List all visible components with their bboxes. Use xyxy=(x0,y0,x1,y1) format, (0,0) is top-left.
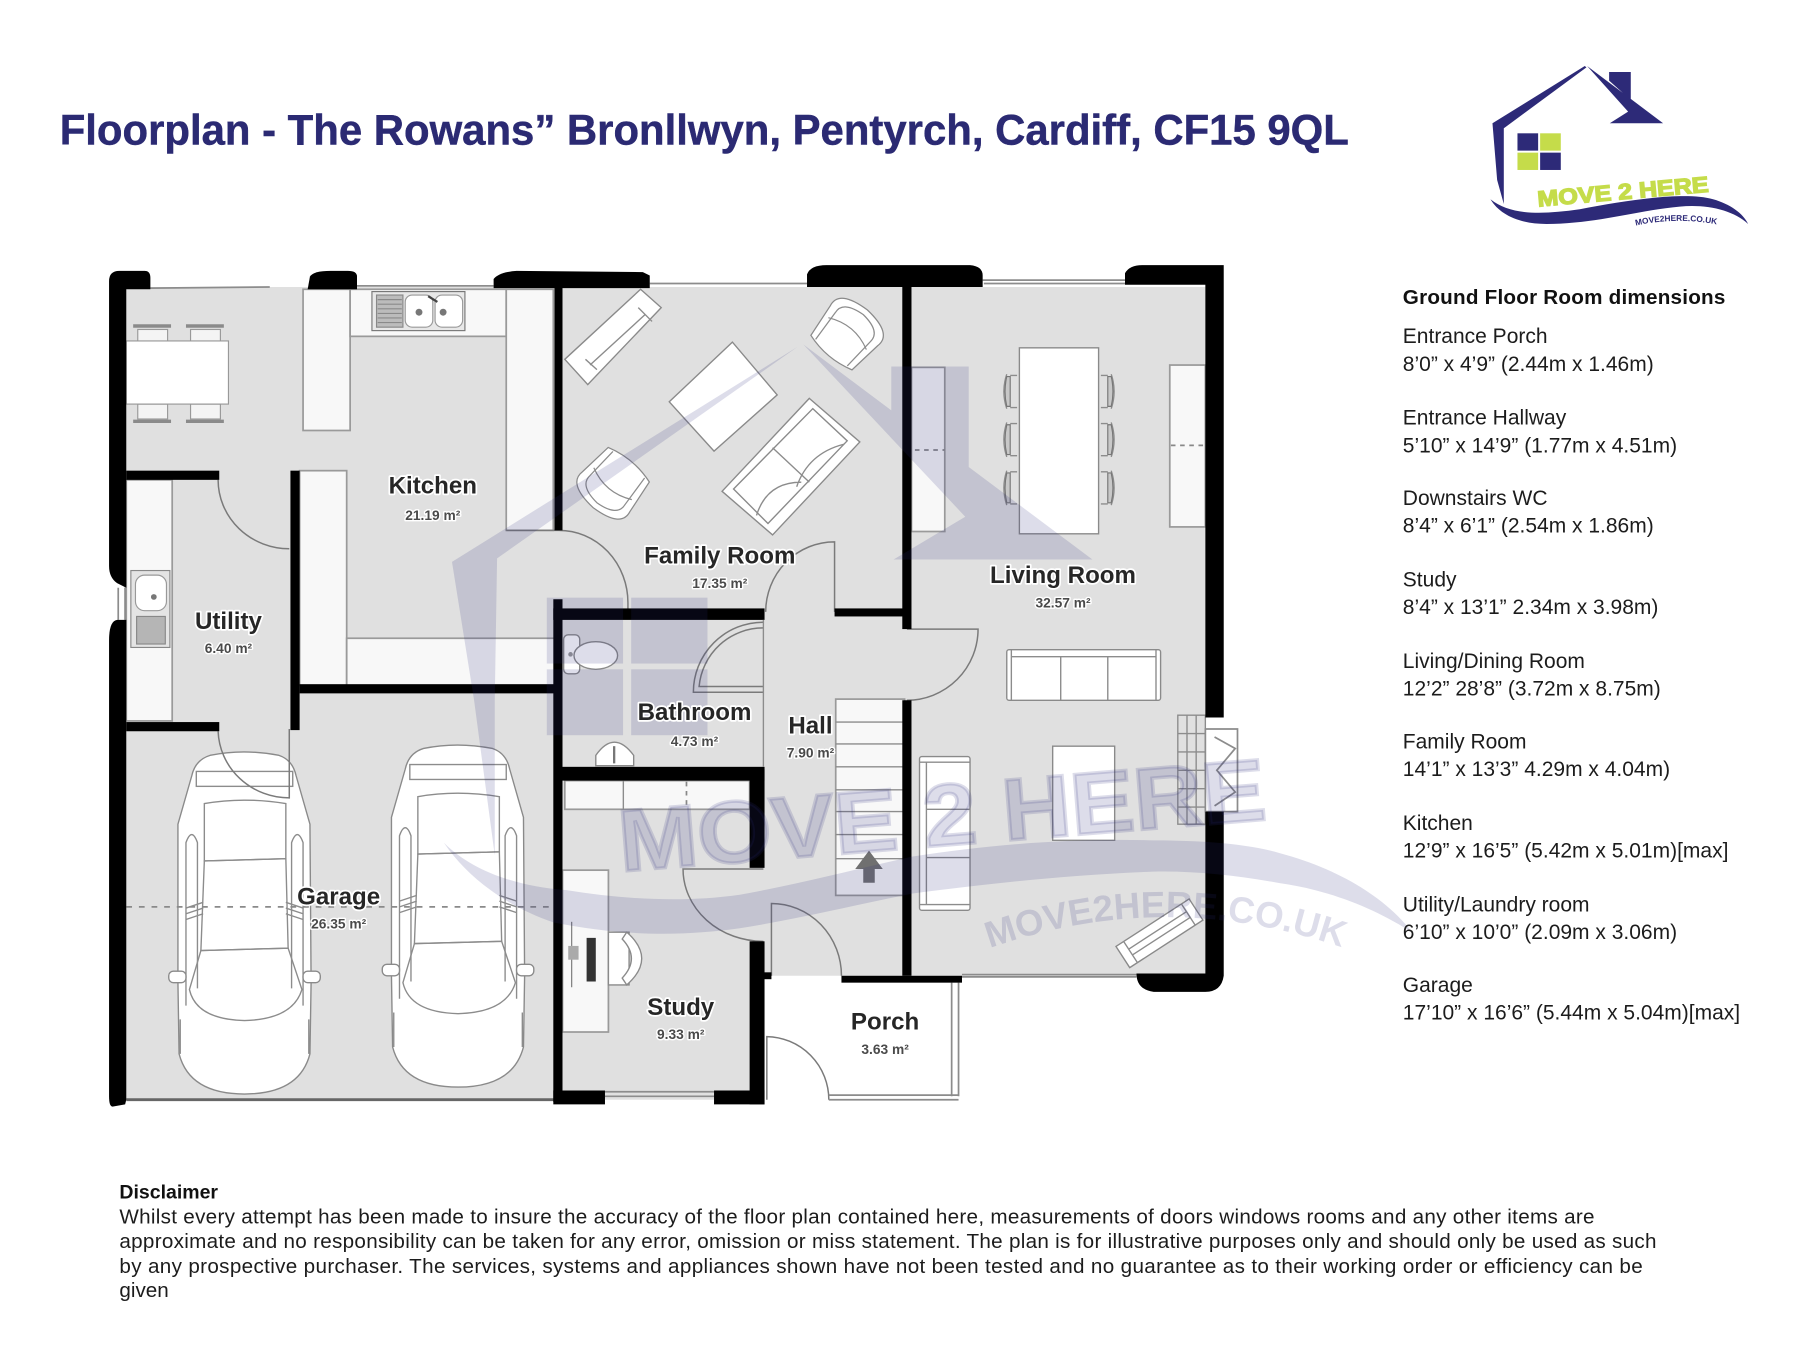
disclaimer body: by any prospective purchaser. The services, systems and appliances shown have not been tested and no guarantee as to their working order or efficiency can be xyxy=(119,1255,1643,1278)
logo: Move 2 Here: MOVE2HERE.CO.UK xyxy=(1635,215,1718,226)
garage label: Garage xyxy=(297,884,380,911)
garage cars and dotted line xyxy=(126,745,554,1094)
garage: Garage xyxy=(1403,974,1473,997)
study label xyxy=(647,994,715,1042)
toilet xyxy=(564,635,618,674)
dining table and chairs xyxy=(1004,348,1114,534)
disclaimer body xyxy=(119,1206,1657,1302)
basin xyxy=(596,742,634,766)
utility counter and sink xyxy=(126,480,172,721)
entrance porch: Entrance Porch xyxy=(1403,325,1548,348)
staircase xyxy=(836,699,905,895)
entrance porch xyxy=(1403,325,1654,376)
logo swoosh xyxy=(1490,196,1748,224)
entrance hallway: 5’10” x 14’9” (1.77m x 4.51m) xyxy=(1403,434,1677,457)
windows xyxy=(118,280,1238,1100)
utility laundry room xyxy=(1403,893,1677,944)
bathroom label xyxy=(638,699,751,749)
porch floor xyxy=(763,978,959,1100)
kitchen xyxy=(1403,812,1728,863)
garage label: 26.35 m² xyxy=(311,917,367,932)
study chair xyxy=(608,932,642,985)
kitchen label xyxy=(389,473,477,523)
utility label: 6.40 m² xyxy=(205,641,253,656)
logo wordmark: MOVE 2 HERE xyxy=(1536,172,1710,212)
hall label: 7.90 m² xyxy=(787,746,835,761)
bench by window xyxy=(1116,899,1203,968)
study desk xyxy=(562,870,608,1032)
downstairs wc: 8’4” x 6’1” (2.54m x 1.86m) xyxy=(1403,515,1654,538)
living room label xyxy=(990,562,1136,610)
title: Floorplan - The Rowans” Bronllwyn, Pentyrch, Cardiff, CF15 9QL xyxy=(60,107,1349,154)
floor area xyxy=(124,287,1205,1100)
up arrow xyxy=(855,851,883,883)
kitchen sink xyxy=(372,292,465,331)
walls xyxy=(109,265,1224,1107)
watermark roof and chimney xyxy=(803,344,1092,560)
bathroom label: Bathroom xyxy=(638,699,751,726)
entrance porch: 8’0” x 4’9” (2.44m x 1.46m) xyxy=(1403,353,1654,376)
family room label: 17.35 m² xyxy=(692,576,748,591)
study units xyxy=(562,781,750,1032)
utility label: Utility xyxy=(195,608,263,635)
watermark url xyxy=(990,917,1357,953)
study label: 9.33 m² xyxy=(657,1027,705,1042)
three-seat sofa xyxy=(1007,650,1161,700)
radiator grid xyxy=(1178,715,1205,824)
entrance hallway: Entrance Hallway xyxy=(1403,407,1567,430)
living room label: Living Room xyxy=(990,562,1136,589)
watermark xyxy=(444,345,1410,948)
study: 8’4” x 13’1” 2.34m x 3.98m) xyxy=(1403,596,1658,619)
hall label xyxy=(787,713,835,761)
study desk items xyxy=(568,922,596,987)
watermark house outline xyxy=(452,347,798,855)
coffee table xyxy=(669,342,777,451)
porch label: 3.63 m² xyxy=(861,1042,909,1057)
family room: 14’1” x 13’3” 4.29m x 4.04m) xyxy=(1403,758,1670,781)
family room: Family Room xyxy=(1403,730,1526,753)
utility laundry room: Utility/Laundry room xyxy=(1403,893,1590,916)
watermark swoosh xyxy=(444,840,1413,934)
family room xyxy=(1403,730,1670,781)
logo: Move 2 Here xyxy=(1490,66,1748,226)
right sideboard xyxy=(1170,365,1205,527)
disclaimer xyxy=(119,1181,1657,1302)
family room label xyxy=(644,543,795,591)
watermark wordmark: MOVE 2 HERE xyxy=(615,742,1269,890)
family room sofa xyxy=(722,398,860,535)
armchair top xyxy=(805,290,891,376)
garage label xyxy=(297,884,380,932)
utility laundry room: 6’10” x 10’0” (2.09m x 3.06m) xyxy=(1403,921,1677,944)
living room low table xyxy=(1053,746,1115,840)
family room label: Family Room xyxy=(644,543,795,570)
dimensions heading: Ground Floor Room dimensions xyxy=(1403,286,1725,309)
bathroom label: 4.73 m² xyxy=(671,734,719,749)
kitchen label: 21.19 m² xyxy=(405,508,461,523)
side sofa xyxy=(920,757,970,910)
utility label xyxy=(195,608,263,656)
study label: Study xyxy=(647,994,715,1021)
living dining room xyxy=(1403,650,1661,701)
garage xyxy=(1403,974,1740,1024)
left sideboard xyxy=(911,367,945,532)
car left xyxy=(169,752,320,1094)
room labels xyxy=(195,473,1136,1057)
disclaimer body: given xyxy=(119,1279,169,1302)
disclaimer heading: Disclaimer xyxy=(119,1181,218,1203)
study: Study xyxy=(1403,569,1457,592)
kitchen: Kitchen xyxy=(1403,812,1473,835)
hall label: Hall xyxy=(788,713,833,740)
bathroom partition xyxy=(762,620,764,767)
entrance hallway xyxy=(1403,407,1677,457)
disclaimer body: approximate and no responsibility can be taken for any error, omission or miss statement. The plan is for illustrative purposes only and should only be used as such xyxy=(119,1230,1657,1253)
downstairs wc: Downstairs WC xyxy=(1403,487,1547,510)
doors xyxy=(218,480,978,1100)
disclaimer body: Whilst every attempt has been made to insure the accuracy of the floor plan contained here, measurements of doors windows rooms and any other items are xyxy=(119,1206,1595,1229)
room dimensions panel xyxy=(1403,286,1740,1024)
kitchen: 12’9” x 16’5” (5.42m x 5.01m)[max] xyxy=(1403,840,1728,863)
coat rack bench xyxy=(565,289,661,385)
family room furniture xyxy=(565,289,891,535)
living dining room: Living/Dining Room xyxy=(1403,650,1585,673)
dining table with chairs xyxy=(126,326,228,421)
study xyxy=(1403,569,1658,619)
car right xyxy=(382,745,534,1087)
watermark window xyxy=(547,598,707,735)
logo window xyxy=(1517,133,1561,170)
logo roof and wall xyxy=(1492,66,1663,204)
living dining room: 12’2” 28’8” (3.72m x 8.75m) xyxy=(1403,678,1661,701)
kitchen label: Kitchen xyxy=(389,473,477,500)
armchair left xyxy=(569,441,656,528)
watermark: MOVE2HERE.CO.UK xyxy=(984,892,1348,948)
kitchen units xyxy=(300,289,554,685)
porch label: Porch xyxy=(851,1009,919,1036)
garage: 17’10” x 16’6” (5.44m x 5.04m)[max] xyxy=(1403,1001,1740,1024)
living room furniture xyxy=(911,348,1205,968)
logo url xyxy=(1636,221,1735,228)
downstairs wc xyxy=(1403,487,1654,538)
floor plan xyxy=(109,265,1237,1107)
living room label: 32.57 m² xyxy=(1035,595,1091,610)
porch label xyxy=(851,1009,919,1057)
